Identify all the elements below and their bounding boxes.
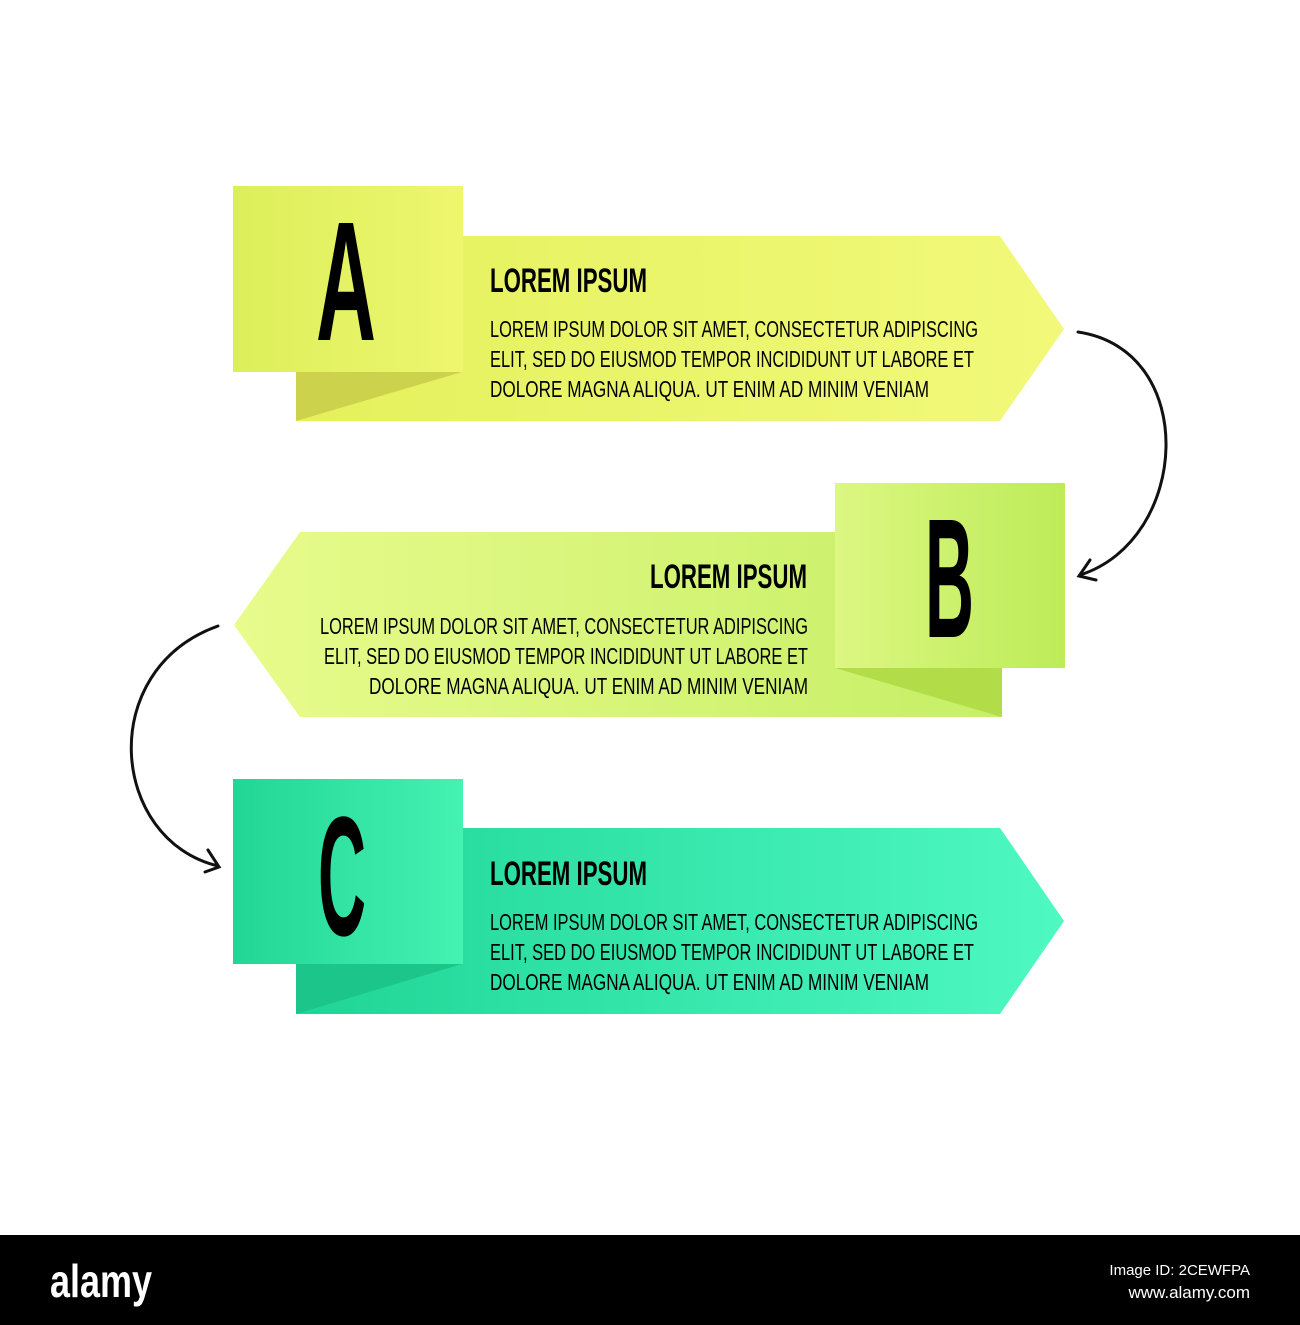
text A [490,316,978,402]
text A: LOREM IPSUM DOLOR SIT AMET, CONSECTETUR ADIPISCING [490,316,978,342]
text A: ELIT, SED DO EIUSMOD TEMPOR INCIDIDUNT UT LABORE ET [490,346,974,372]
footer bar [0,1235,1300,1325]
panel: C: C [318,782,366,972]
heading B: LOREM IPSUM [650,558,807,596]
text C: ELIT, SED DO EIUSMOD TEMPOR INCIDIDUNT UT LABORE ET [490,939,974,965]
footer logo: alamy [50,1255,152,1307]
text C: DOLORE MAGNA ALIQUA. UT ENIM AD MINIM VENIAM [490,969,929,995]
heading C: LOREM IPSUM [490,855,647,893]
panel: A: A [316,187,376,377]
arrow: A to B [1078,332,1166,580]
text A: DOLORE MAGNA ALIQUA. UT ENIM AD MINIM VENIAM [490,376,929,402]
panel: C [233,779,1064,1014]
text C [490,909,978,995]
panel: B: B [925,484,974,674]
arrow: B to C [131,626,219,872]
text B [320,613,808,699]
panel: A [233,186,1064,421]
footer bar: www.alamy.com [1127,1283,1250,1302]
text B: LOREM IPSUM DOLOR SIT AMET, CONSECTETUR ADIPISCING [320,613,808,639]
footer id: Image ID: 2CEWFPA [1109,1262,1250,1279]
heading A: LOREM IPSUM [490,262,647,300]
text C: LOREM IPSUM DOLOR SIT AMET, CONSECTETUR ADIPISCING [490,909,978,935]
text B: DOLORE MAGNA ALIQUA. UT ENIM AD MINIM VENIAM [369,673,808,699]
panel: B [234,483,1065,717]
text B: ELIT, SED DO EIUSMOD TEMPOR INCIDIDUNT UT LABORE ET [324,643,808,669]
